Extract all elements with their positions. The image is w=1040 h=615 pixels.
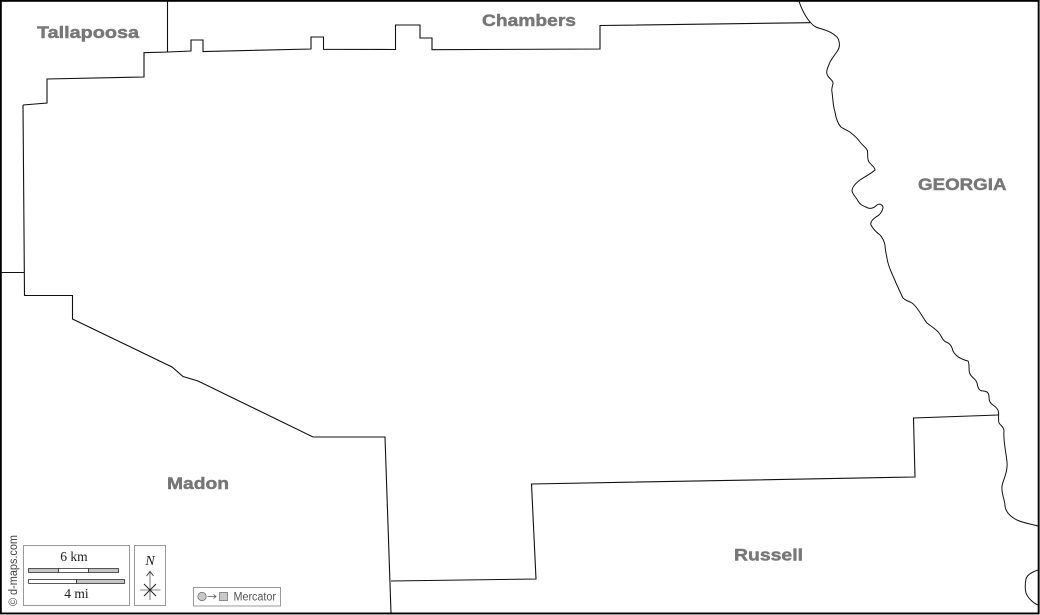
river: Chattahoochee state border [799,1,1038,526]
scale label: mi: 4 mi [64,586,89,601]
credit: d-maps.com: © d-maps.com [8,535,20,606]
label: GEORGIA: GEORGIA [918,175,1006,194]
arrow icon [208,594,216,598]
label: Tallapoosa: Tallapoosa [37,23,140,42]
label: Russell: Russell [734,546,803,564]
label: Madon: Madon [167,474,229,493]
km bar [28,568,118,572]
circle icon [198,592,206,601]
north arrow box [134,546,166,606]
lake at east edge [1025,570,1038,605]
projection label: Mercator [234,592,276,604]
letter N: N [144,554,155,569]
square icon [220,592,228,600]
scale label: km: 6 km [60,549,88,564]
compass arrow [140,572,160,600]
projection legend: Mercator [194,588,280,606]
mi bar [28,580,124,584]
label: Chambers: Chambers [482,11,576,30]
scale bar box [24,546,130,606]
